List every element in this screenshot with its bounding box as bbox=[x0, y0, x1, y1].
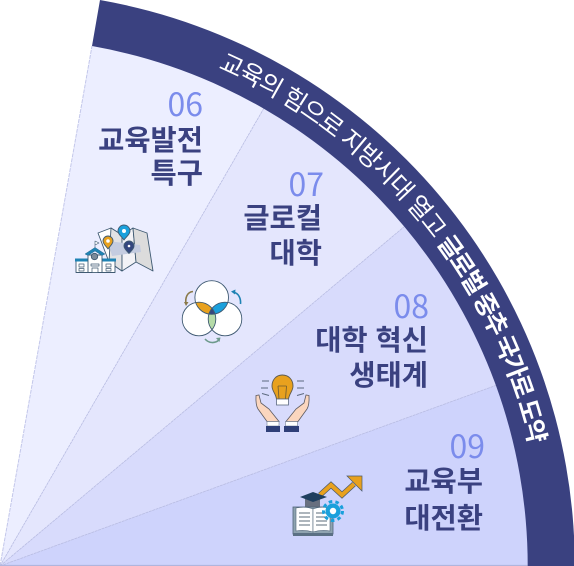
section 07 title: 글로컬 bbox=[243, 203, 322, 235]
icon: venn diagram bbox=[182, 281, 242, 343]
panel: sector 06 bbox=[0, 46, 264, 566]
panel: sector 08 bbox=[0, 226, 497, 566]
banner text: 교육의 힘으로 지방시대 열고 글로벌 중추 국가로 도약 bbox=[219, 53, 549, 442]
panel: sector 09 bbox=[0, 385, 528, 566]
section 08 number: 08 bbox=[393, 282, 429, 328]
section 06 number: 06 bbox=[167, 80, 203, 126]
panel: sector 07 bbox=[0, 108, 405, 566]
icon: book, cap, gear and growth arrow bbox=[293, 476, 362, 536]
section 07 title: 대학 bbox=[270, 238, 322, 270]
section 09 title: 교육부 bbox=[404, 466, 483, 498]
icon: map and school bbox=[75, 225, 153, 272]
section 06 title: 교육발전 bbox=[98, 125, 203, 157]
section 08 title: 대학 혁신 bbox=[315, 325, 428, 357]
section 09 number: 09 bbox=[449, 422, 485, 468]
icon: light bulb in hands bbox=[256, 375, 309, 432]
section 09 title: 대전환 bbox=[404, 503, 483, 535]
section 07 number: 07 bbox=[288, 160, 324, 206]
section 08 title: 생태계 bbox=[349, 360, 428, 392]
section 06 title: 특구 bbox=[151, 158, 203, 190]
